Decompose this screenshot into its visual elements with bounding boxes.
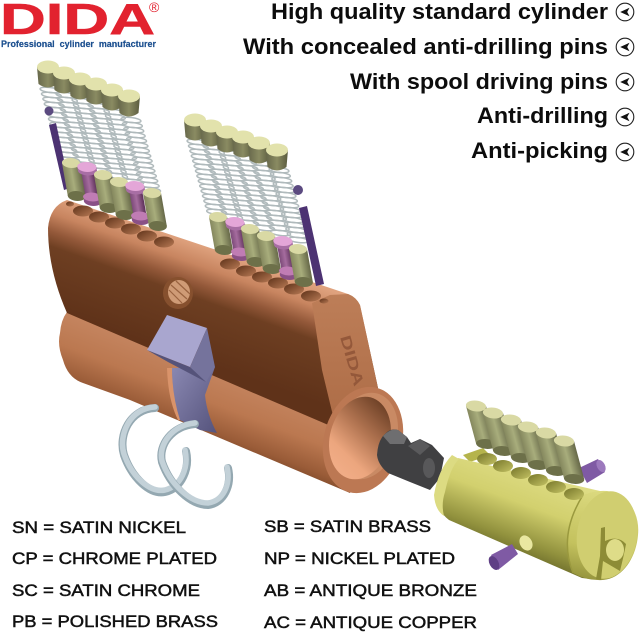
holes: [66, 202, 328, 304]
feature list: With spool driving pins: [350, 69, 608, 94]
key plug: brass body: [434, 448, 640, 583]
key plug: pins: [465, 400, 586, 484]
finish legend: left column: [12, 518, 218, 631]
finish legend: left column: SN = SATIN NICKEL: [12, 518, 186, 537]
spring and pin stack: left: [37, 60, 168, 231]
spring and pin stack: right: [184, 114, 324, 287]
retaining clips: [122, 407, 229, 505]
cylinder body: copper housing: [48, 200, 415, 502]
finish legend: left column: CP = CHROME PLATED: [12, 549, 217, 568]
feature list: Anti-picking: [471, 138, 608, 163]
key plug: dark adapter: [377, 430, 444, 490]
plug head and face: [567, 487, 640, 583]
cam: [147, 315, 217, 433]
label: DIDA engraving: DIDA: [336, 333, 367, 388]
logo: DIDA: Professional cylinder manufacturer: [1, 39, 156, 50]
collar and bore: [311, 378, 415, 502]
end face: [312, 294, 378, 424]
finish legend: right column: NP = NICKEL PLATED: [264, 549, 455, 568]
anti-drill rod and ball: [293, 185, 324, 286]
anti-drill rod and ball: [44, 106, 70, 190]
holes: [477, 453, 584, 500]
finish legend: left column: PB = POLISHED BRASS: [12, 612, 218, 631]
finish legend: right column: AC = ANTIQUE COPPER: [264, 613, 477, 632]
finish legend: left column: SC = SATIN CHROME: [12, 581, 200, 600]
side hole: [517, 533, 535, 553]
logo: DIDA: [0, 0, 160, 50]
finish legend: right column: SB = SATIN BRASS: [264, 517, 431, 536]
threaded hole: [163, 277, 193, 309]
feature list: Anti-drilling: [477, 103, 608, 128]
finish legend: right column: [264, 517, 477, 632]
finish legend: right column: AB = ANTIQUE BRONZE: [264, 581, 477, 600]
feature list: With concealed anti-drilling pins: [243, 34, 608, 59]
key plug: purple pins: [487, 458, 608, 572]
feature list: [243, 0, 634, 163]
